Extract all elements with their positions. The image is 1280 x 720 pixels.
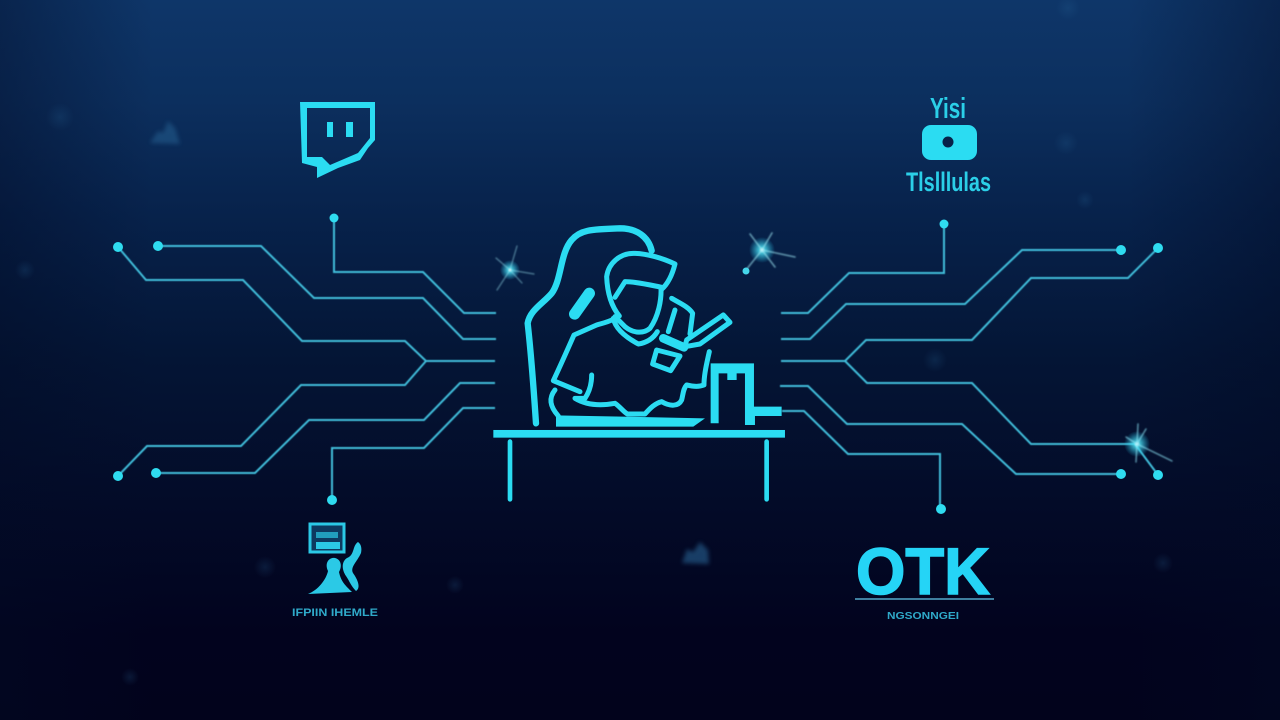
desk top	[493, 430, 785, 438]
phone and hand	[653, 298, 730, 371]
icon: YouTube logo with labels	[906, 93, 991, 197]
sparkle near chair	[496, 246, 534, 290]
icon: presenter with screen	[292, 524, 378, 619]
gaming chair	[528, 228, 652, 423]
rule under logo	[855, 598, 994, 600]
keyboard	[556, 415, 705, 427]
decorative cloud blob: upper left	[150, 121, 180, 144]
central figure: streamer at desk	[493, 228, 785, 499]
left circuit nodes	[113, 214, 338, 505]
decorative cloud blob: lower centre	[682, 542, 709, 564]
icon: Twitch logo	[300, 102, 375, 178]
right circuit traces	[780, 224, 1158, 509]
logo caption: NGSONNGEI	[887, 610, 959, 622]
label: top: Yisi	[930, 93, 966, 125]
logo: OTK: OTK	[856, 534, 990, 608]
caption: IFPIIN IHEMLE	[292, 607, 378, 619]
label: bottom: Tlslllulas	[906, 167, 991, 197]
right circuit nodes	[936, 220, 1163, 514]
monitor	[711, 363, 782, 425]
desk legs	[510, 442, 767, 499]
sparkle top right of figure	[742, 233, 795, 274]
head and hair	[607, 253, 675, 344]
left circuit traces	[118, 218, 496, 500]
torso and arms	[551, 319, 709, 416]
sparkle on right circuit	[1124, 424, 1172, 462]
